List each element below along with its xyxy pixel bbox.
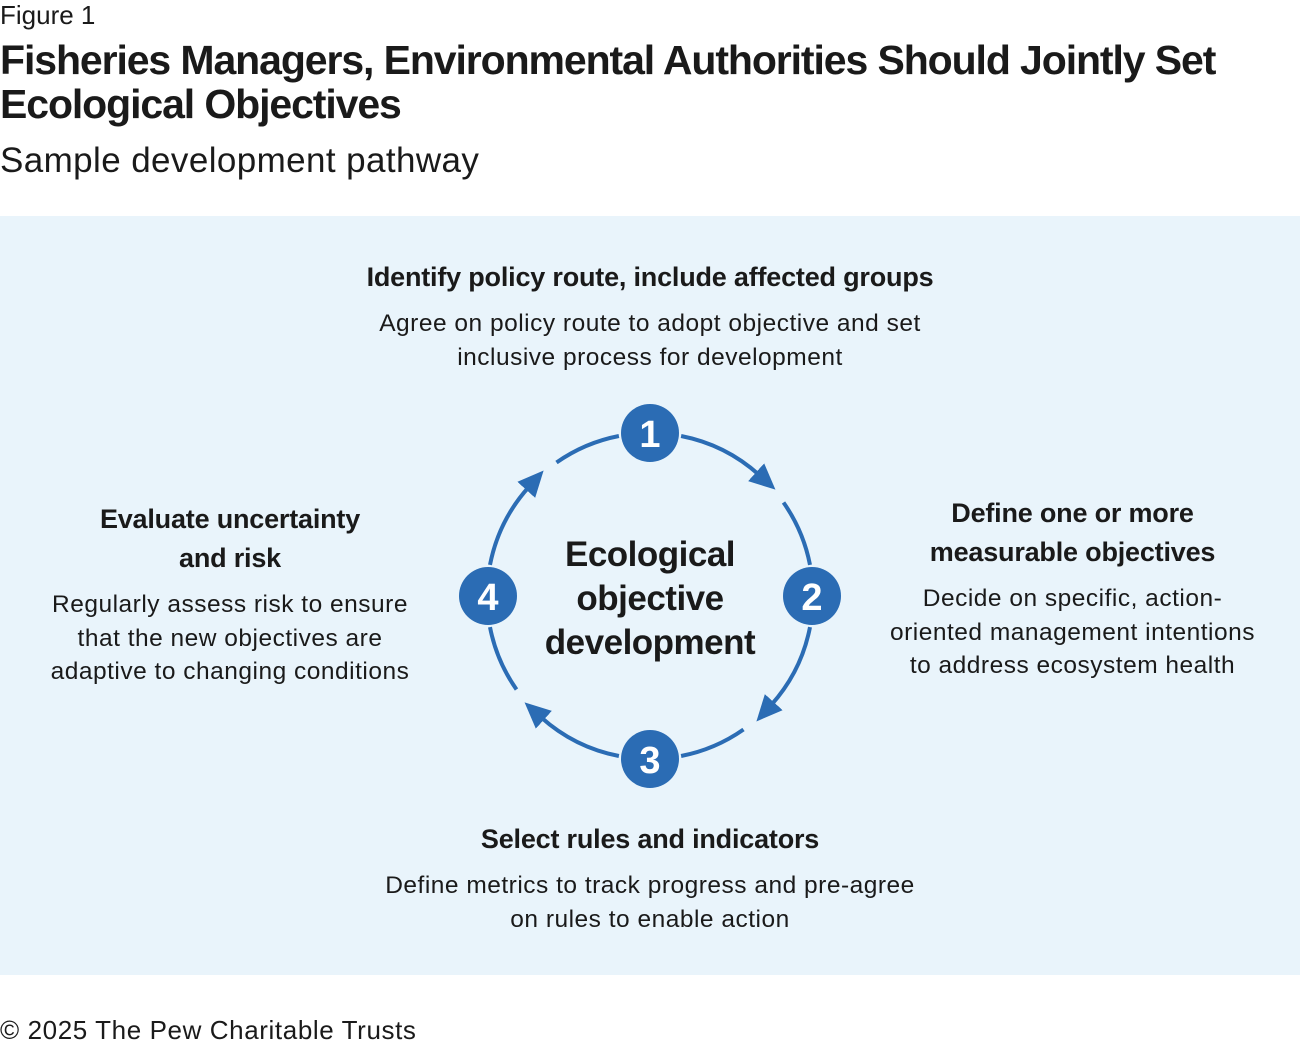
step 2 text: Define one or more	[951, 498, 1194, 528]
step 4 text: adaptive to changing conditions	[51, 658, 409, 685]
step 3 text: Select rules and indicators	[481, 824, 819, 854]
step 2 text	[890, 498, 1255, 679]
subtitle: Sample development pathway	[0, 141, 479, 180]
step 3 text: Define metrics to track progress and pre-agree	[385, 872, 915, 899]
step 1 text: Agree on policy route to adopt objective and set	[379, 310, 921, 337]
title	[0, 37, 1216, 127]
node 3	[621, 730, 679, 788]
node 3: 3	[639, 740, 661, 782]
step 3 text: on rules to enable action	[510, 906, 790, 932]
node 2: 2	[801, 577, 823, 619]
center label: objective	[576, 579, 724, 618]
step 4 text: Evaluate uncertainty	[100, 504, 360, 534]
step 4 text	[51, 504, 409, 685]
step 1 text: Identify policy route, include affected groups	[367, 262, 933, 292]
center label	[545, 535, 756, 662]
node 1: 1	[639, 414, 661, 456]
step 3 text	[385, 824, 915, 932]
step 2 text: oriented management intentions	[890, 618, 1255, 646]
node 2	[783, 567, 841, 625]
center label: Ecological	[565, 535, 735, 574]
step 2 text: Decide on specific, action-	[923, 585, 1222, 612]
footer: © 2025 The Pew Charitable Trusts	[0, 1015, 417, 1045]
node 4: 4	[477, 577, 499, 619]
center label: development	[545, 623, 756, 662]
title: Fisheries Managers, Environmental Authorities Should Jointly Set	[0, 37, 1215, 83]
step 2 text: to address ecosystem health	[910, 652, 1235, 679]
figure label: Figure 1	[0, 0, 95, 30]
step 4 text: Regularly assess risk to ensure	[52, 591, 408, 618]
node 4	[459, 567, 517, 625]
step 4 text: that the new objectives are	[78, 624, 382, 652]
title: Ecological Objectives	[0, 81, 401, 127]
panel: pathway	[0, 216, 1300, 975]
step 1 text	[367, 262, 933, 370]
step 4 text: and risk	[179, 543, 281, 573]
step 1 text: inclusive process for development	[457, 344, 843, 370]
step 2 text: measurable objectives	[930, 537, 1215, 567]
node 1	[621, 404, 679, 462]
